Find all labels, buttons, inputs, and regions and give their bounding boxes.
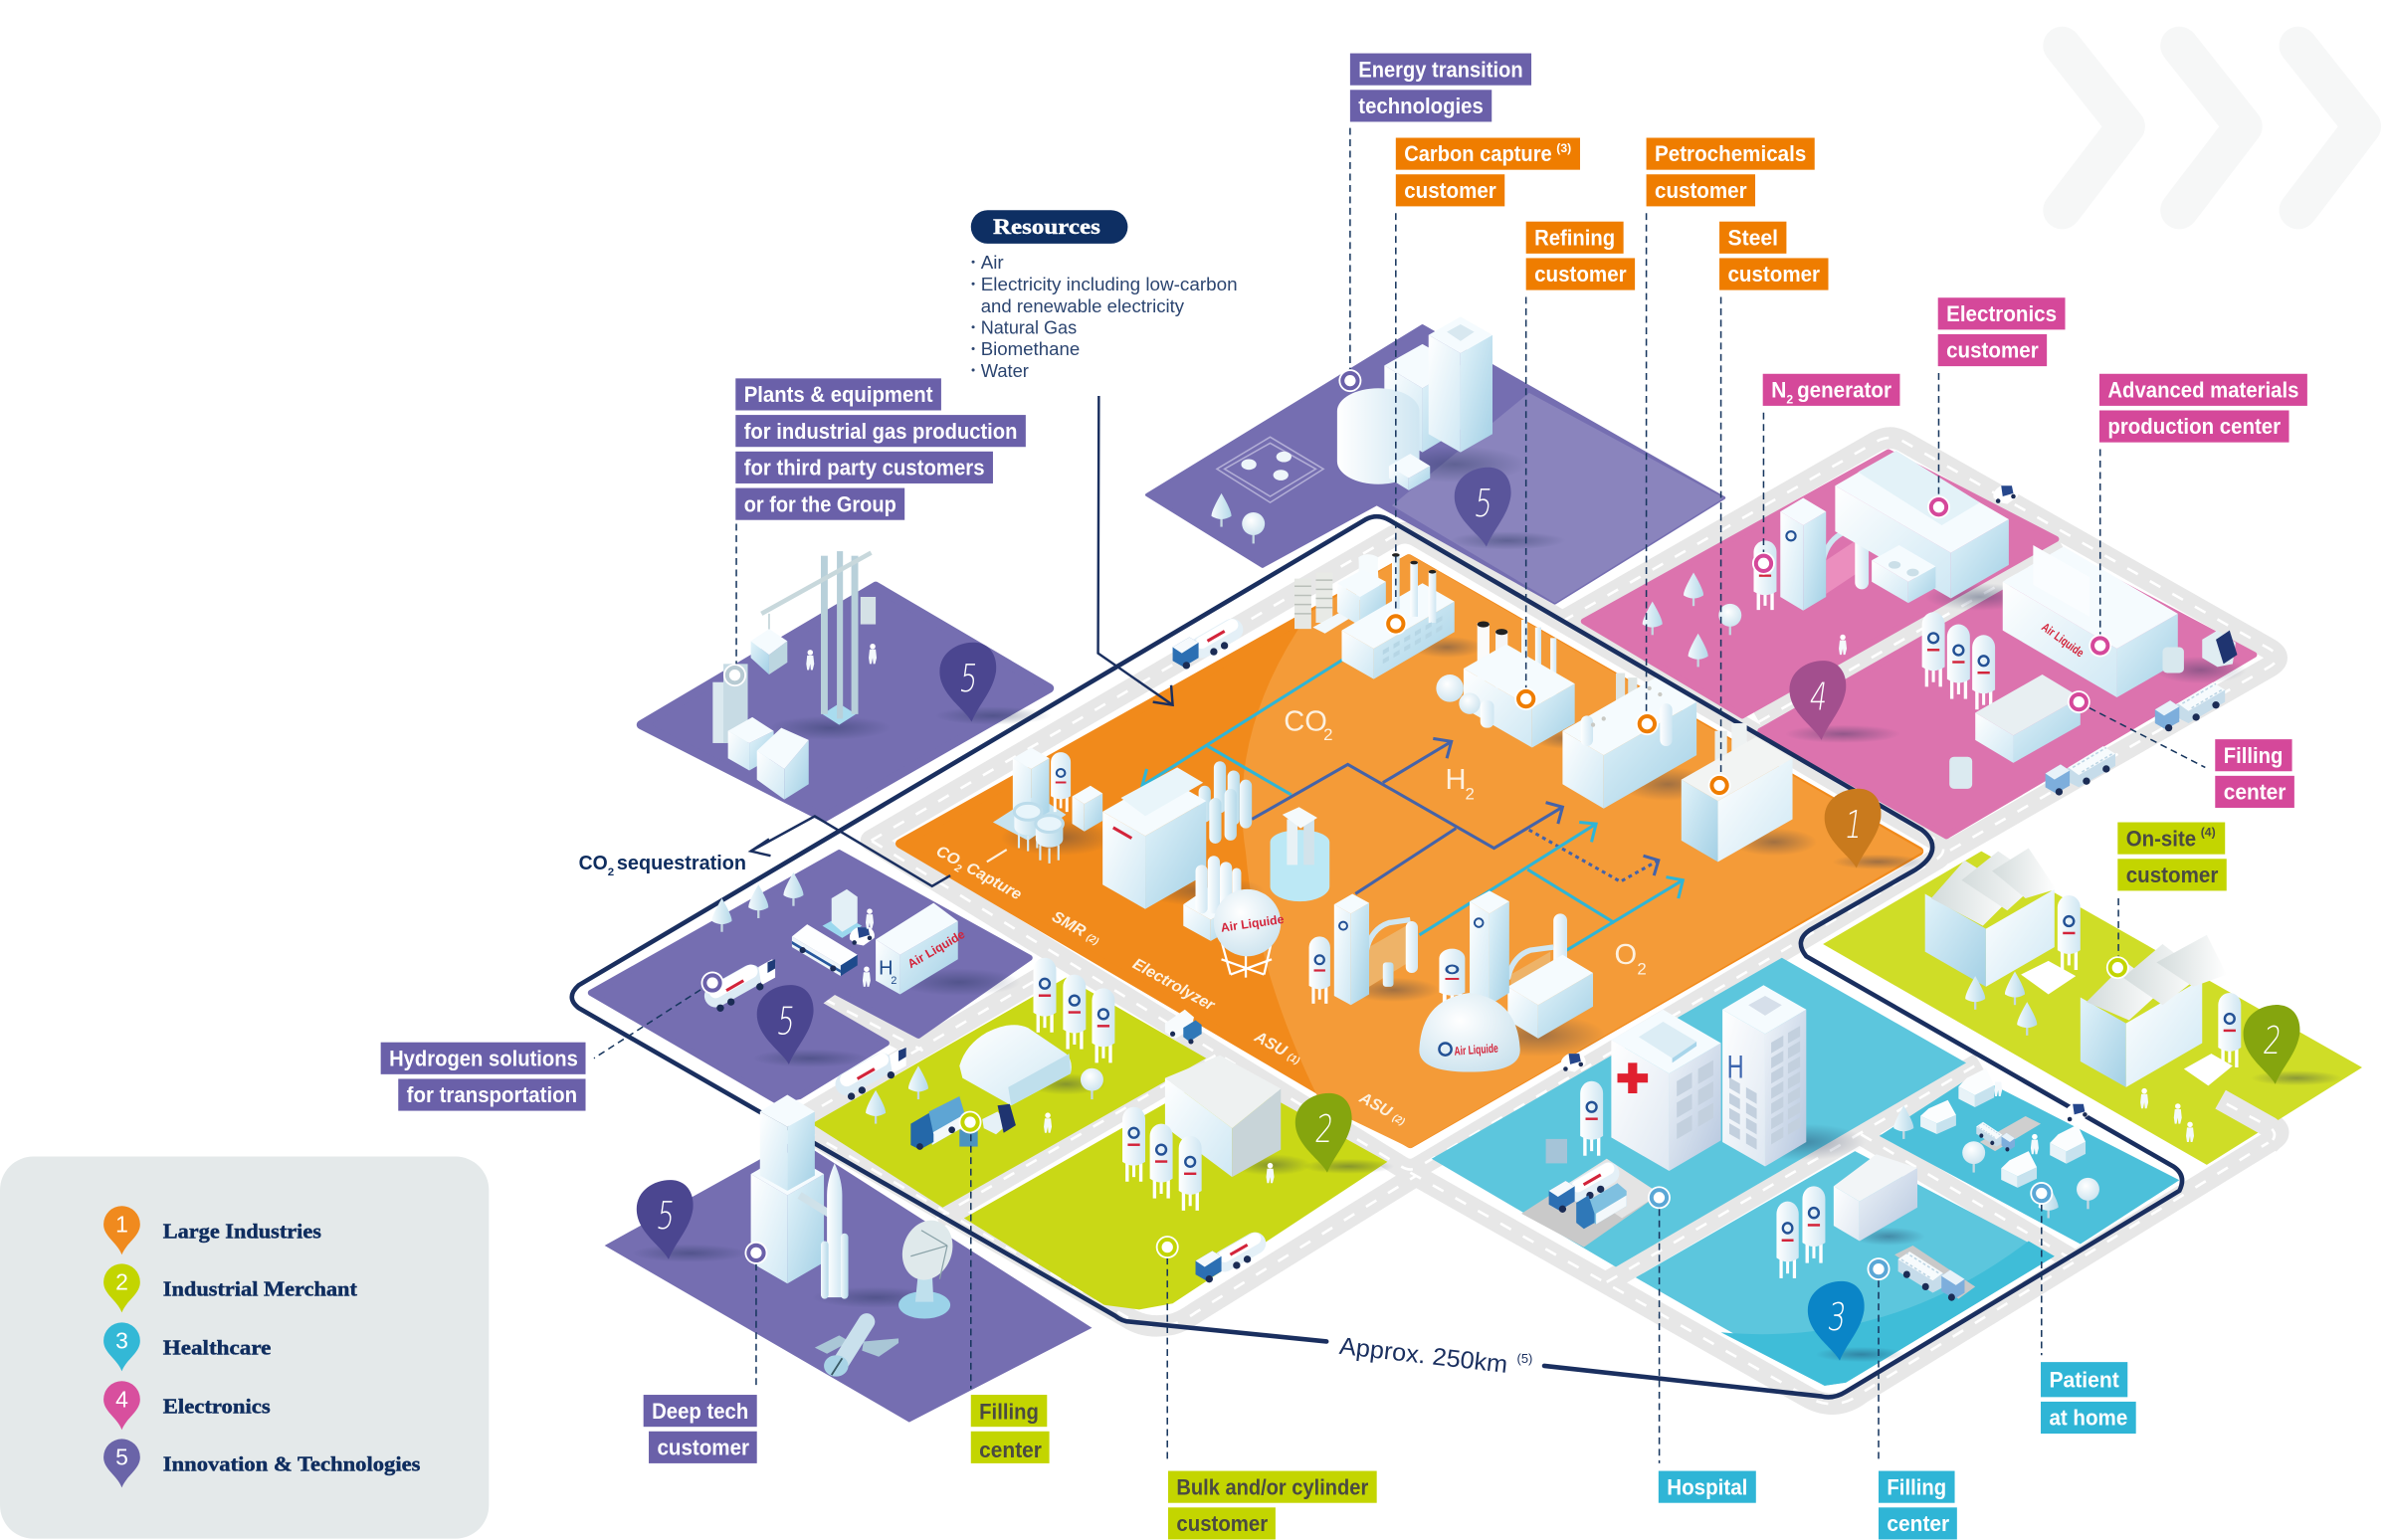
panel: innovation plants and equipment block xyxy=(641,586,1050,818)
callout: deep tech customer: Deep tech xyxy=(652,1399,748,1424)
pin: innovation 5 left: 5 xyxy=(957,657,981,700)
callout: N2 generator xyxy=(1763,374,1899,407)
pin: large industries 1: 1 xyxy=(1842,802,1866,847)
callout: refining customer: customer xyxy=(1534,262,1627,287)
panel: industrial merchant lower block xyxy=(964,1070,1387,1309)
truck: tanker on upper road xyxy=(1173,625,1232,670)
callout: healthcare filling center: center xyxy=(1887,1511,1950,1536)
healthcare site: homes xyxy=(1893,1068,2099,1218)
legend item: electronics: 4 xyxy=(115,1386,128,1412)
legend item: healthcare: 3 xyxy=(115,1327,128,1353)
callout: N2 generator: generator xyxy=(1797,377,1891,402)
arrow: O2 flow xyxy=(1420,823,1683,952)
callout: bulk and cylinder customer: customer xyxy=(1176,1511,1269,1536)
callout: electronics customer: Electronics xyxy=(1946,301,2057,326)
callout: petrochemicals customer xyxy=(1647,138,1815,206)
callout: energy transition technologies xyxy=(1350,54,1531,121)
electronics site: tanks and person xyxy=(1839,612,1995,709)
pin: innovation 5 hydrogen: 5 xyxy=(774,999,798,1043)
chevron watermark arrows xyxy=(2062,46,2362,210)
panel: innovation hydrogen mobility block xyxy=(591,853,1030,1101)
resources list xyxy=(972,252,1238,381)
electronics site: N2 generator xyxy=(1643,498,1869,667)
callout: deep tech customer: customer xyxy=(657,1436,749,1460)
panel: large industries block xyxy=(900,554,1923,1148)
O2 gas label: O xyxy=(1614,939,1637,971)
plant: CO2 capture unit xyxy=(993,748,1116,864)
callout: bulk and cylinder customer xyxy=(1168,1471,1377,1539)
callout: electronics filling center xyxy=(2215,739,2294,808)
H2 gas label xyxy=(1446,764,1475,804)
panel: electronics upper block xyxy=(1584,453,2056,715)
callout: plants and equipment: Plants & equipment xyxy=(744,382,933,407)
callout: carbon capture customer: customer xyxy=(1404,178,1496,203)
customer: steel plant xyxy=(1682,723,1817,862)
pin: electronics 4: 4 xyxy=(1807,674,1831,718)
plant: hydrogen storage sphere xyxy=(1214,889,1285,978)
resources heading xyxy=(971,210,1127,244)
callout: hospital: Hospital xyxy=(1667,1474,1747,1499)
callout: merchant filling center xyxy=(971,1395,1050,1463)
resources list: Biomethane xyxy=(981,338,1080,359)
arrow: dotted H2 flow xyxy=(1529,830,1659,881)
legend item: large industries: 1 xyxy=(115,1211,128,1237)
plant: ASU second unit xyxy=(1419,890,1605,1072)
hydrogen storage building: Air Liquide xyxy=(905,927,967,971)
pin: electronics 4 xyxy=(1785,661,1900,743)
approx 250km boundary line xyxy=(572,516,2182,1397)
hospital: H xyxy=(1727,1050,1744,1085)
panel: legend xyxy=(0,1156,489,1539)
callout: deep tech customer xyxy=(644,1395,757,1463)
truck: electrolyzer road xyxy=(1165,1010,1202,1045)
callout: steel customer xyxy=(1719,222,1829,290)
pin: industrial merchant 2 left: 2 xyxy=(1312,1107,1336,1151)
panel: healthcare home care block xyxy=(1880,1075,2179,1245)
customer: refinery xyxy=(1436,620,1605,749)
arrow: CO2 flow xyxy=(1142,660,1343,795)
callout: patient at home: Patient xyxy=(2049,1367,2119,1392)
CO2 sequestration label: sequestration xyxy=(617,852,746,874)
on-site customer factories xyxy=(1925,849,2241,1142)
callout: merchant filling center: Filling xyxy=(979,1400,1039,1425)
callout: hydrogen solutions for transportation: Hydrogen solutions xyxy=(389,1046,578,1070)
legend item: industrial merchant: 2 xyxy=(115,1268,128,1294)
healthcare site: filling center xyxy=(1776,1154,1964,1301)
callout: petrochemicals customer: Petrochemicals xyxy=(1655,141,1806,166)
truck: electronics lower xyxy=(2046,746,2115,796)
CO2 sequestration label xyxy=(579,852,746,878)
arrow: resources input xyxy=(1098,396,1173,705)
callout: steel customer: Steel xyxy=(1727,225,1778,250)
hydrogen storage building: H xyxy=(879,958,894,980)
legend item: large industries xyxy=(103,1206,321,1254)
callout: hydrogen solutions for transportation xyxy=(381,1043,586,1111)
callout: plants and equipment xyxy=(735,378,1026,520)
legend item: innovation and technologies: 5 xyxy=(115,1444,128,1469)
pin: innovation 5 hydrogen xyxy=(752,985,868,1067)
legend item: large industries: Large Industries xyxy=(163,1219,321,1243)
legend item: innovation and technologies xyxy=(103,1439,420,1487)
approx 250km label: (5) xyxy=(1516,1351,1532,1366)
cars on roads xyxy=(1561,485,2090,1122)
plant: ASU first unit xyxy=(1309,893,1439,1005)
callout: advanced materials production center: production center xyxy=(2107,414,2281,439)
CO2 sequestration label: CO xyxy=(579,852,608,874)
panel: innovation energy transition block xyxy=(1147,326,1724,603)
plant: hydrogen storage sphere: Air Liquide xyxy=(1220,912,1285,935)
pin: industrial merchant 2 right xyxy=(2244,1005,2342,1085)
callout: electronics customer: customer xyxy=(1946,338,2039,363)
callout: electronics customer xyxy=(1938,297,2066,366)
electronics site: advanced materials production center: Air Liquide xyxy=(2039,620,2087,660)
road network xyxy=(800,438,2279,1404)
resources list: Electricity including low-carbon xyxy=(981,274,1238,294)
electronics site: filling center xyxy=(1949,674,2081,789)
callout: on-site customer: (4) xyxy=(2201,825,2216,839)
hydrogen storage building: 2 xyxy=(891,975,896,987)
callout: plants and equipment: for third party customers xyxy=(744,456,985,481)
customer: petrochemical plant xyxy=(1562,674,1716,809)
callout: petrochemicals customer: customer xyxy=(1655,178,1747,203)
approx 250km label: Approx. 250km xyxy=(1338,1333,1509,1379)
plant: electrolyzer cluster xyxy=(1183,856,1241,941)
panel: innovation deep tech block xyxy=(605,1139,1092,1423)
H2 gas label: 2 xyxy=(1465,785,1475,804)
legend item: electronics xyxy=(103,1381,271,1430)
merchant site: hangar and filling xyxy=(866,958,1114,1150)
location markers xyxy=(701,369,2129,1280)
legend item: innovation and technologies: Innovation & Technologies xyxy=(163,1452,420,1476)
forklift xyxy=(982,1104,1016,1134)
process labels on road: 2 xyxy=(951,862,963,875)
process labels on road: Capture xyxy=(959,857,1025,903)
H2 gas label: H xyxy=(1446,764,1467,796)
arrow: CO2 sequestration xyxy=(751,816,950,886)
panel: electronics lower block xyxy=(1760,556,2254,836)
process labels on road: ASU (2) xyxy=(1355,1088,1410,1129)
resources list: Water xyxy=(981,360,1029,381)
callout: on-site customer: On-site xyxy=(2126,826,2196,851)
process labels on road: CO xyxy=(933,842,963,869)
pin: large industries 1 xyxy=(1825,789,1923,869)
callout: advanced materials production center xyxy=(2099,374,2307,443)
callout: healthcare filling center: Filling xyxy=(1887,1474,1946,1499)
legend item: healthcare: Healthcare xyxy=(163,1335,271,1359)
callout: carbon capture customer: (3) xyxy=(1556,141,1571,155)
resources list: and renewable electricity xyxy=(981,295,1185,316)
plant: electrolyzer tank xyxy=(1271,807,1329,901)
truck: tanker at bulk site xyxy=(1196,1239,1255,1282)
process labels on road: SMR (2) xyxy=(1049,907,1103,949)
road stub on on-site block xyxy=(2221,1099,2275,1143)
truck: tanker on lower road xyxy=(847,1048,906,1100)
pin: industrial merchant 2 right: 2 xyxy=(2261,1019,2285,1062)
CO2 sequestration label: 2 xyxy=(608,866,614,878)
panel: healthcare hospital block xyxy=(1432,958,1966,1266)
plant: SMR building xyxy=(1102,767,1264,909)
callout: on-site customer xyxy=(2117,823,2227,890)
panel: industrial merchant upper block xyxy=(812,978,1206,1208)
satellite xyxy=(815,1322,898,1377)
crate truck xyxy=(910,1096,964,1150)
callout: healthcare filling center xyxy=(1879,1471,1957,1539)
legend item: healthcare xyxy=(103,1322,271,1371)
hydrogen station site xyxy=(712,872,1021,996)
callout: merchant filling center: center xyxy=(979,1438,1042,1462)
legend item: industrial merchant: Industrial Merchant xyxy=(163,1277,358,1301)
callout: bulk and cylinder customer: Bulk and/or cylinder xyxy=(1176,1474,1369,1499)
resources heading: Resources xyxy=(993,214,1100,239)
pin: healthcare 3: 3 xyxy=(1825,1295,1849,1339)
truck: electronics upper xyxy=(2155,682,2225,731)
pin: innovation 5 top: 5 xyxy=(1472,481,1495,525)
fuel pump xyxy=(823,889,862,938)
callout: patient at home: at home xyxy=(2049,1406,2127,1431)
callout: advanced materials production center: Advanced materials xyxy=(2107,377,2298,402)
callout: plants and equipment: for industrial gas production xyxy=(744,419,1017,444)
CO2 gas label: 2 xyxy=(1323,725,1332,744)
panel: industrial merchant on-site block xyxy=(1823,852,2362,1165)
plant: ASU second unit: Air Liquide xyxy=(1454,1042,1498,1059)
pin: healthcare 3 xyxy=(1808,1281,1906,1362)
pin: industrial merchant 2 left xyxy=(1295,1093,1394,1174)
panel: healthcare filling block xyxy=(1636,1151,2055,1386)
truck: hospital delivery xyxy=(1549,1169,1627,1229)
callout: electronics filling center: center xyxy=(2224,780,2287,805)
callout: refining customer: Refining xyxy=(1534,225,1615,250)
energy transition site xyxy=(1212,316,1527,543)
O2 gas label: 2 xyxy=(1637,960,1647,979)
pin: innovation 5 bottom: 5 xyxy=(654,1194,678,1238)
hydrogen bus xyxy=(792,924,858,976)
process labels on road: ASU (1) xyxy=(1251,1028,1304,1068)
callout: energy transition technologies: Energy transition xyxy=(1358,57,1523,82)
electronics site: fab xyxy=(1835,451,2035,611)
customer: carbon capture plant xyxy=(1294,553,1484,679)
truck: hydrogen xyxy=(715,959,775,1012)
callout: plants and equipment: or for the Group xyxy=(744,491,896,516)
pin: innovation 5 left xyxy=(935,643,1051,725)
callout: energy transition technologies: technologies xyxy=(1358,94,1484,118)
deep tech site xyxy=(751,1095,961,1377)
resources list: Natural Gas xyxy=(981,317,1077,338)
callout: carbon capture customer xyxy=(1396,138,1580,206)
plants and equipment site xyxy=(712,551,891,800)
pin: innovation 5 top xyxy=(1450,468,1565,550)
resources list: Air xyxy=(981,252,1004,273)
callout: steel customer: customer xyxy=(1727,262,1820,287)
CO2 gas label: CO xyxy=(1284,706,1327,738)
callout: N2 generator: 2 xyxy=(1786,393,1793,407)
callout: hydrogen solutions for transportation: for transportation xyxy=(407,1082,577,1107)
dashed leader lines xyxy=(594,128,2205,1463)
legend item: industrial merchant xyxy=(103,1263,358,1312)
callout: N2 generator: N xyxy=(1771,377,1786,402)
legend item: electronics: Electronics xyxy=(163,1394,271,1418)
callout: electronics filling center: Filling xyxy=(2224,743,2283,768)
merchant site: bulk tanks and warehouse xyxy=(1122,1056,1311,1211)
callout: hospital xyxy=(1659,1471,1756,1503)
process labels on road: Electrolyzer xyxy=(1129,955,1218,1015)
arrow: H2 flow xyxy=(1252,738,1562,893)
hospital xyxy=(1546,985,1866,1171)
O2 gas label xyxy=(1614,939,1647,979)
plant: SMR reformer columns xyxy=(1199,761,1252,844)
hydrogen storage building xyxy=(876,903,967,994)
electronics site: advanced materials production center xyxy=(2003,545,2247,697)
callout: patient at home xyxy=(2041,1362,2136,1434)
callout: refining customer xyxy=(1526,222,1635,290)
process labels on road xyxy=(931,842,1410,1129)
pin: innovation 5 bottom xyxy=(632,1180,748,1262)
callout: carbon capture customer: Carbon capture xyxy=(1404,141,1552,166)
callout: on-site customer: customer xyxy=(2126,863,2219,887)
